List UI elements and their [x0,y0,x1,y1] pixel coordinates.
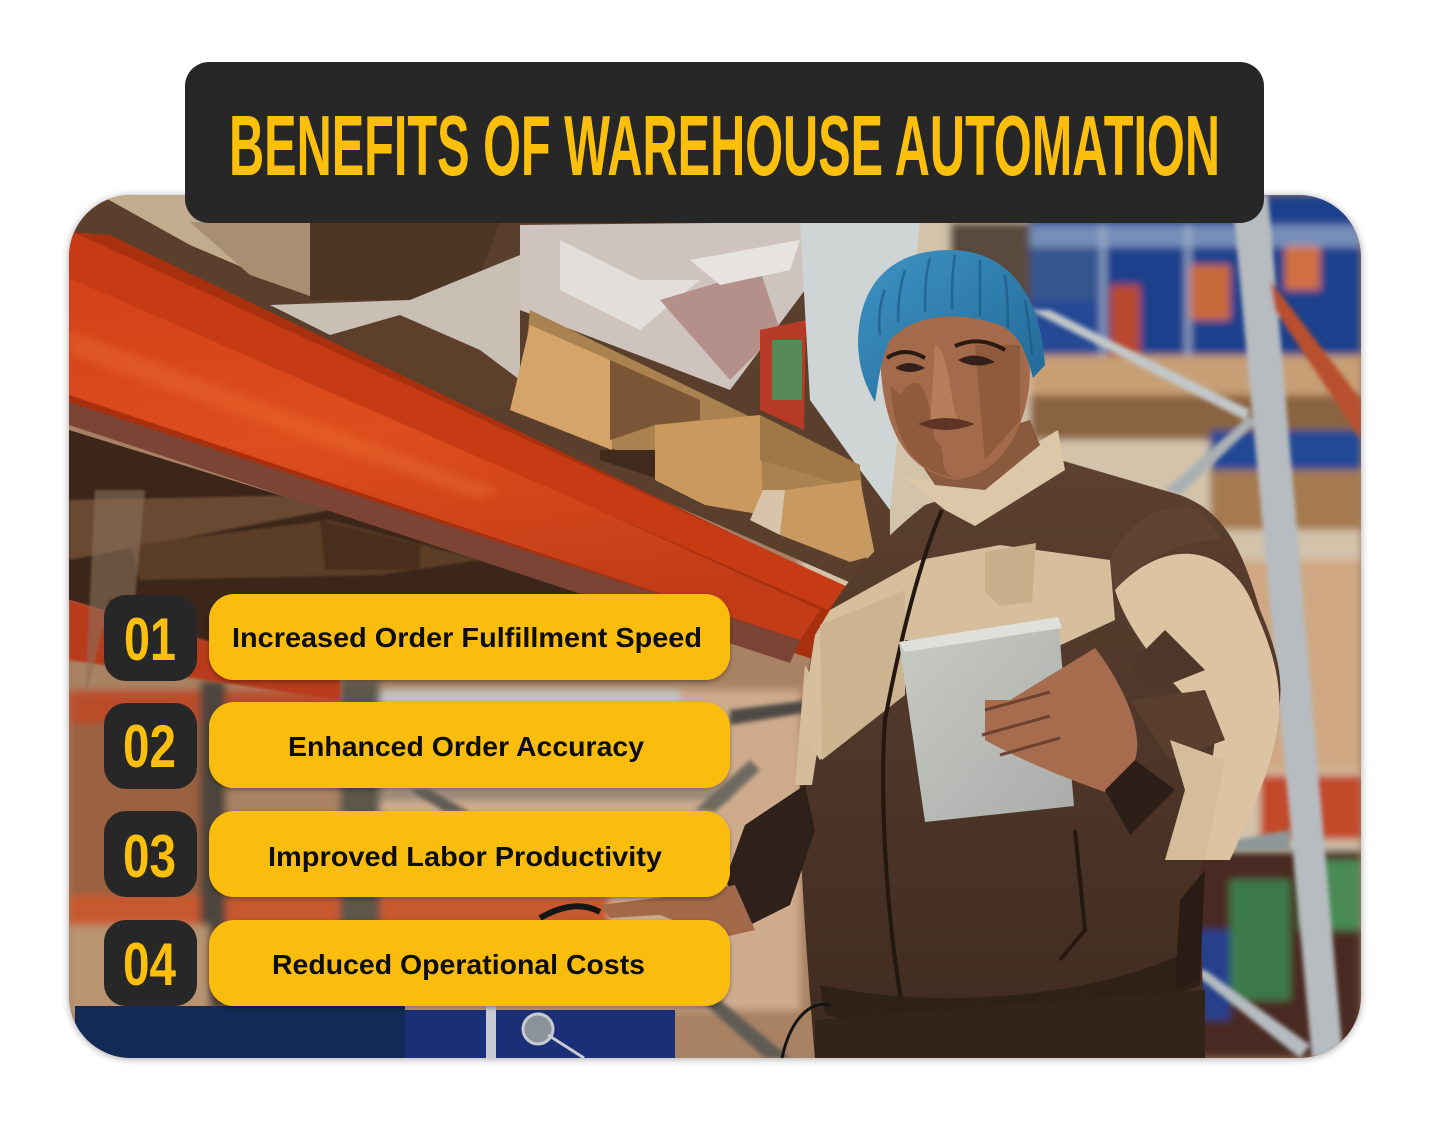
pill: Improved Labor Productivity [209,811,730,897]
neck [915,420,1040,490]
number badge 04: 04 [123,931,176,998]
panel shadow [69,196,1361,1059]
number badge 03: 03 [123,823,176,890]
wooden pallet [520,310,870,560]
forearm sleeve, viewer left [725,785,815,925]
pill: Enhanced Order Accuracy: Enhanced Order Accuracy [288,731,644,762]
mouth [918,418,975,430]
tablet [899,617,1074,822]
benefit row 4 [104,920,730,1006]
dark shelf timber under beam [69,430,581,642]
benefit row 1 [104,594,730,681]
number badge 03 [104,811,197,897]
other hand [600,885,755,938]
beige sleeve [1115,554,1279,860]
dark backing behind the load [69,195,890,600]
pill: Increased Order Fulfillment Speed: Increased Order Fulfillment Speed [232,622,702,653]
hand on tablet [985,648,1137,792]
beige chest yoke [800,545,1115,760]
pill: Improved Labor Productivity: Improved Labor Productivity [268,841,662,872]
collar [905,430,1065,526]
title bar [185,62,1264,223]
red shelf beam [69,230,850,663]
pallets and wrapped goods top [69,195,920,600]
panel: warehouse photo [69,195,1361,1070]
pill: Reduced Operational Costs [209,920,730,1006]
worker figure [540,250,1280,1060]
shoulder brown [1110,561,1142,590]
number badge 04 [104,920,197,1006]
pocket flap [985,543,1036,606]
jacket body [800,460,1280,1060]
dark end behind drums [950,222,1040,312]
pill: Enhanced Order Accuracy [209,702,730,788]
racks lower left [69,690,339,724]
blue drums [1026,195,1361,360]
eyes [895,363,925,372]
background: blurred warehouse racks [69,195,1361,1058]
jacket shadow and folds [1060,830,1085,960]
benefit row 2 [104,702,730,789]
pill: Reduced Operational Costs: Reduced Operational Costs [272,949,645,980]
pill: Increased Order Fulfillment Speed [209,594,730,680]
zipper [883,510,942,1020]
number badge 02 [104,703,197,789]
steel rack uprights [410,195,1361,1058]
face [880,310,1030,480]
benefit row 3 [104,811,730,897]
number badge 02: 02 [123,713,176,780]
beanie [858,250,1045,402]
number badge 01 [104,595,197,681]
blue drum bottom [75,1006,675,1058]
number badge 01: 01 [124,606,176,673]
